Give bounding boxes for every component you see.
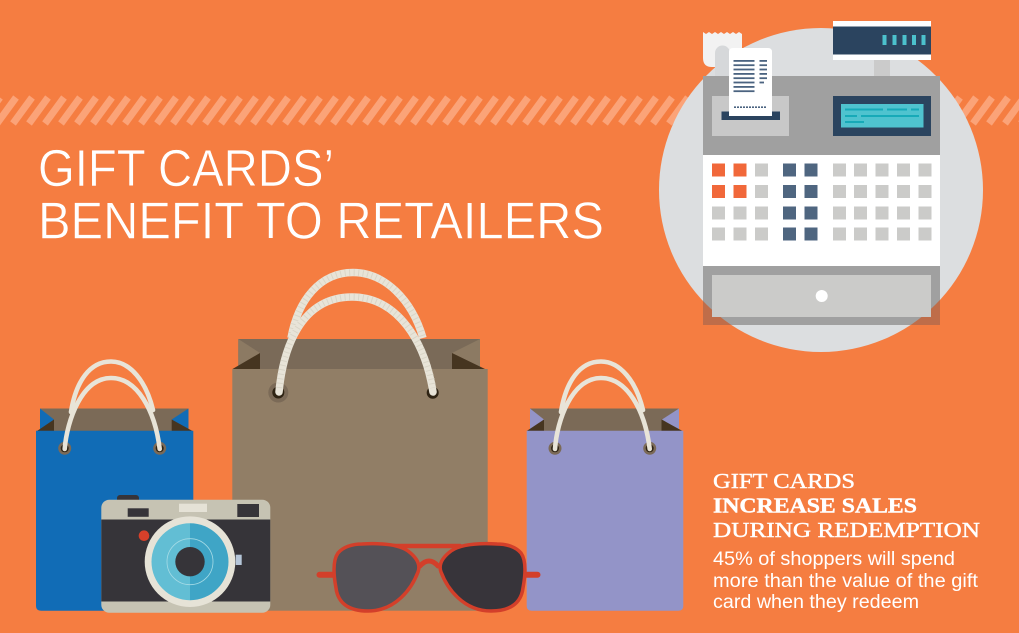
register display [833,96,931,136]
callout body text: 45% of shoppers will spend [713,549,955,570]
icon: sunglasses [320,544,538,611]
icon: cash register in circle [659,21,983,352]
icon: camera [101,495,270,613]
callout body text: card when they redeem [713,592,919,613]
callout: gift cards increase sales [713,469,980,613]
cash drawer [703,266,940,325]
customer display [833,21,931,77]
callout body text [713,549,979,613]
receipt tail [703,32,742,77]
callout body text: more than the value of the gift [713,571,979,592]
keypad [703,155,940,266]
background circle [659,28,983,352]
title: GIFT CARDS’ [38,140,334,198]
callout heading [713,469,980,542]
title [38,140,604,250]
register upper housing [703,76,940,155]
callout heading: DURING REDEMPTION [713,518,980,542]
title: BENEFIT TO RETAILERS [38,192,604,250]
shopping bag: purple [527,362,683,611]
shopping bag: blue [36,362,193,611]
callout heading: INCREASE SALES [713,494,917,518]
callout heading: GIFT CARDS [713,469,855,493]
shopping bag: large brown [232,272,488,611]
printer [712,48,789,136]
